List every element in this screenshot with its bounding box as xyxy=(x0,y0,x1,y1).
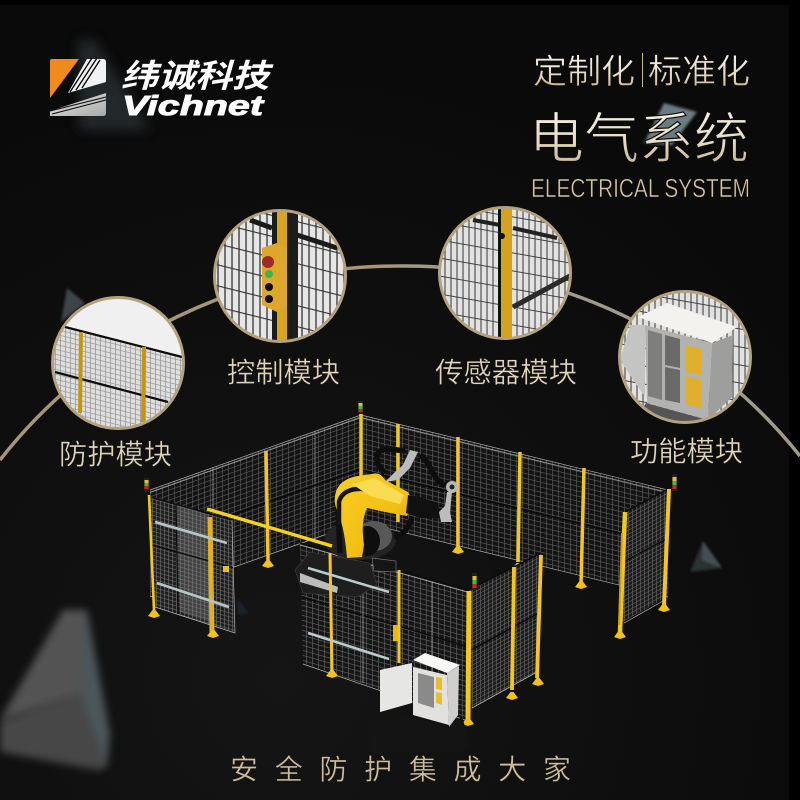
logo latin name: Vichnet xyxy=(122,90,265,121)
function thumbnail xyxy=(621,293,749,421)
title: 电气系统 xyxy=(529,108,749,170)
right side wall xyxy=(614,489,670,639)
control thumbnail xyxy=(216,212,344,340)
door panel xyxy=(148,495,235,638)
sensor thumbnail xyxy=(438,206,572,340)
arm side hose xyxy=(339,489,370,525)
back posts xyxy=(262,414,587,589)
header block xyxy=(529,53,750,203)
front wall left xyxy=(300,543,468,721)
module: protection xyxy=(50,295,190,470)
robot xyxy=(295,449,458,597)
back left wall xyxy=(150,415,361,597)
hoses xyxy=(338,449,445,553)
robot base xyxy=(295,552,377,597)
robot arm yellow xyxy=(335,473,411,558)
control ring xyxy=(214,210,346,342)
silver carriage xyxy=(300,573,338,593)
connecting arc xyxy=(0,266,800,460)
divider xyxy=(642,53,643,87)
logo chinese name: 纬诚科技 xyxy=(121,58,274,94)
module: sensor xyxy=(435,206,577,388)
english title: ELECTRICAL SYSTEM xyxy=(531,175,750,203)
function ring xyxy=(620,292,750,422)
logo xyxy=(50,58,274,121)
function label: 功能模块 xyxy=(630,436,743,467)
yellow horizontal bar xyxy=(207,509,332,546)
protection label: 防护模块 xyxy=(59,439,172,470)
logo mark xyxy=(50,58,106,116)
sensor label: 传感器模块 xyxy=(435,357,577,388)
module: control xyxy=(212,208,348,388)
cabinet reflection xyxy=(368,716,470,752)
subtitle: 定制化 xyxy=(533,54,635,91)
module: function xyxy=(618,290,752,467)
back right wall xyxy=(361,415,668,597)
arm highlight xyxy=(352,478,404,504)
fence and robot scene xyxy=(144,401,677,752)
sensor ring xyxy=(440,208,570,338)
protection ring xyxy=(52,298,184,428)
gripper xyxy=(385,450,458,522)
electrical cabinet xyxy=(380,653,460,727)
protection thumbnail xyxy=(54,299,182,427)
front wall posts and rails xyxy=(308,553,389,678)
subtitle right: 标准化 xyxy=(648,54,750,91)
footer slogan: 安全防护集成大家 xyxy=(230,754,571,785)
front right wall xyxy=(462,553,544,726)
motor housing xyxy=(324,520,396,572)
control label: 控制模块 xyxy=(227,357,340,388)
signal towers xyxy=(144,401,677,590)
